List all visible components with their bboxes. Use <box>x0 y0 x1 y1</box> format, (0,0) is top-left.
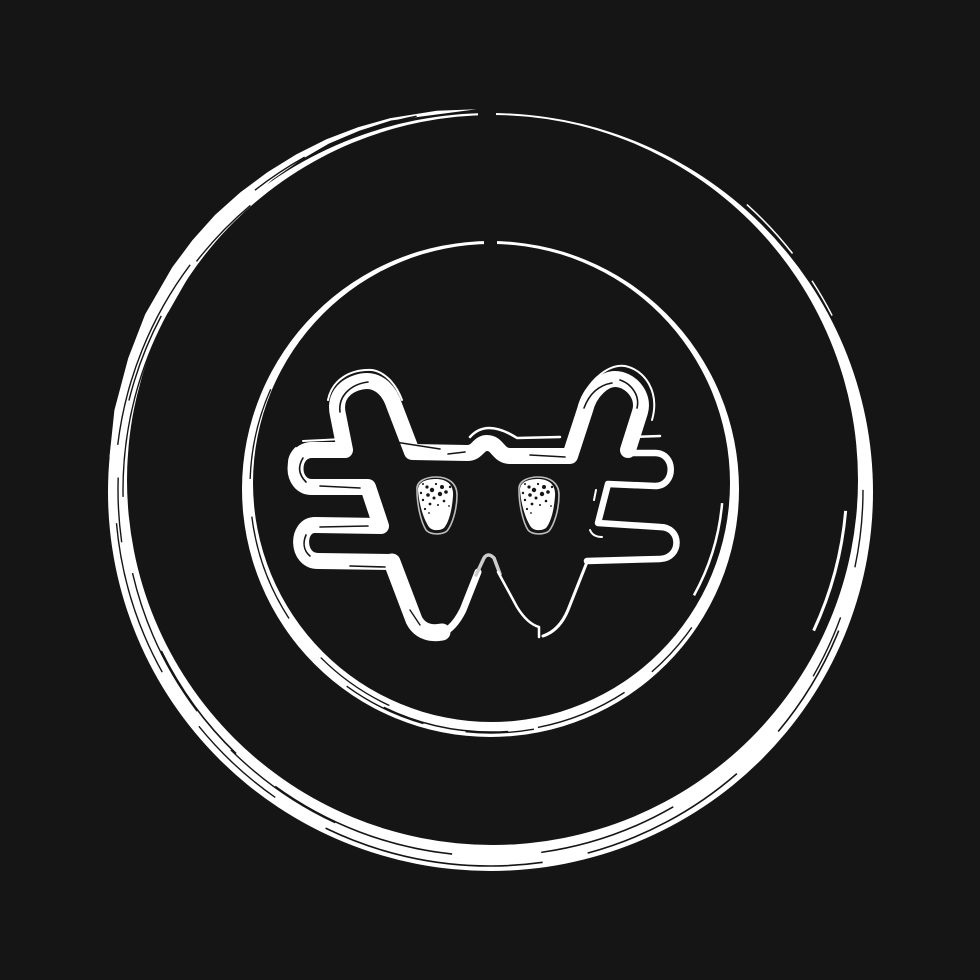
lower left stroke of the W <box>392 562 442 633</box>
dark brush scratches on the won sign <box>300 380 638 625</box>
left bars of the won sign <box>296 450 392 562</box>
right bars of the won sign <box>587 453 676 561</box>
inner brush ring <box>242 234 739 737</box>
rising stroke of the W <box>432 572 478 634</box>
centre peak of the W <box>476 555 500 575</box>
icon: left eye <box>417 477 457 534</box>
won currency sign <box>289 366 676 637</box>
outer brush ring <box>106 100 874 874</box>
thin descending stroke of the W <box>498 572 539 637</box>
thin rising stroke of the W <box>543 562 587 636</box>
icon: right eye <box>519 477 559 534</box>
arches and top bar of the won sign <box>337 379 641 456</box>
outer brush strands of the won sign <box>289 366 660 537</box>
